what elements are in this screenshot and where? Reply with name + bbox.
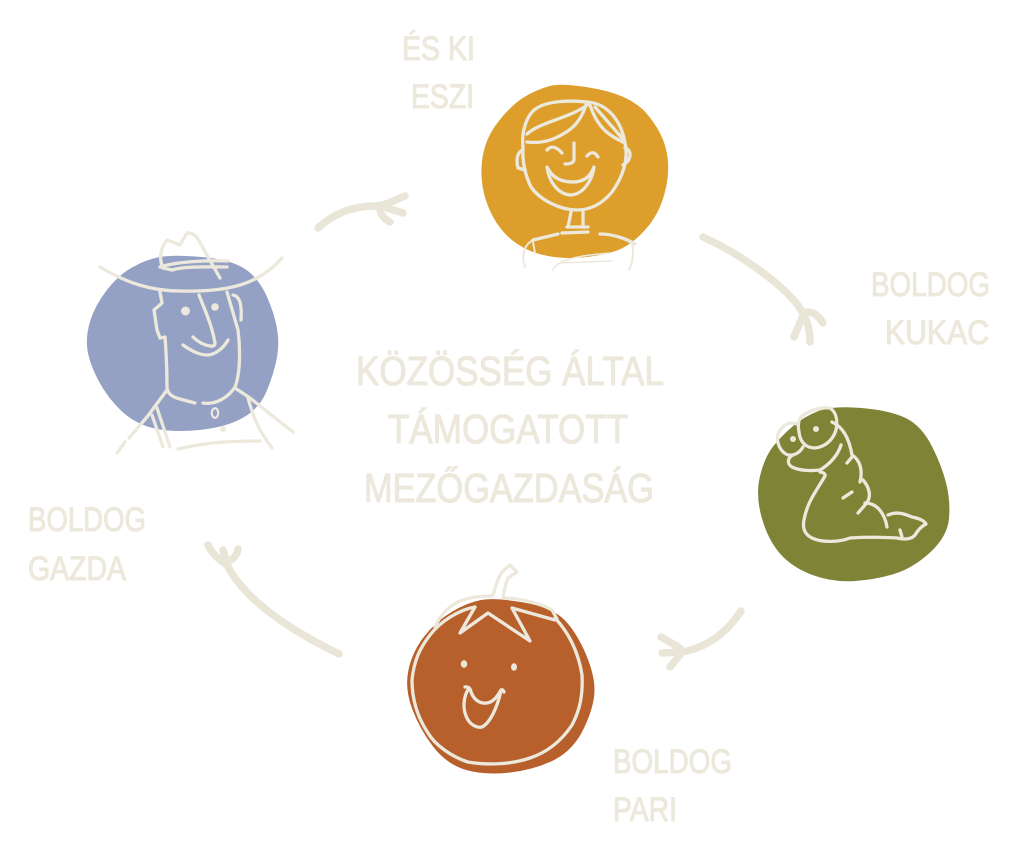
arrow: farmer to eater [318,196,405,228]
illustration: happy farmer [89,233,293,453]
title [356,348,664,511]
label: boldog kukac [871,266,990,352]
label: és ki eszi [402,30,475,116]
arrow: worm to tomato [661,611,741,667]
title: MEZŐGAZDASÁG [364,465,654,511]
label: boldog pari [613,743,732,829]
label: és ki eszi: ÉS KI [402,30,475,68]
illustration: smiling eater [484,87,666,270]
illustration: happy worm [761,408,947,579]
label: boldog pari: BOLDOG [613,743,732,781]
label: boldog gazda [28,501,146,588]
title: TÁMOGATOTT [388,406,628,452]
label: boldog kukac: KUKAC [885,314,989,352]
label: boldog pari: PARI [613,791,677,829]
label: boldog kukac: BOLDOG [871,266,990,304]
arrow: eater to worm [703,237,823,342]
label: boldog gazda: BOLDOG [28,501,146,539]
label: boldog gazda: GAZDA [28,550,126,588]
illustration: happy tomato [410,565,592,771]
title: KÖZÖSSÉG ÁLTAL [356,348,664,394]
label: és ki eszi: ESZI [411,78,474,116]
arrow: tomato to farmer [208,545,339,654]
